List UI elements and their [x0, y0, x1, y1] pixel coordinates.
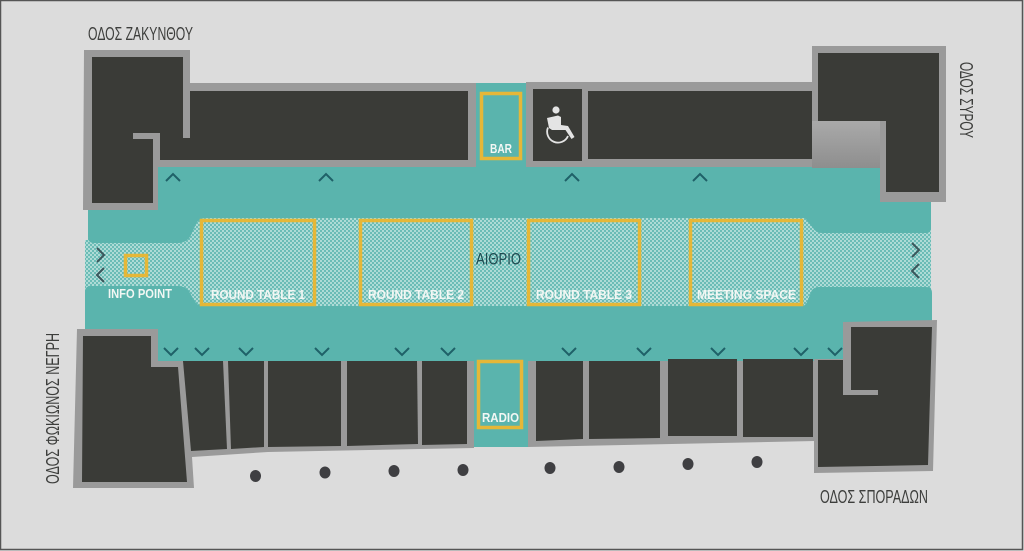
building: south-east block [814, 320, 937, 473]
building: south-east shops [528, 359, 815, 447]
street label: Sporadon: ΟΔΟΣ ΣΠΟΡΑΔΩΝ [820, 487, 928, 507]
dotted central aisle [85, 216, 931, 308]
zone: round table 1 [202, 220, 314, 304]
label: info point: INFO POINT [108, 286, 172, 301]
building: south-west block [73, 329, 474, 488]
arrows: east exits [912, 243, 919, 278]
arrows: south exits [164, 348, 842, 355]
atrium floor [85, 83, 932, 447]
zone: radio [478, 362, 522, 428]
label: round table 1: ROUND TABLE 1 [211, 287, 305, 302]
building: north-west block [83, 50, 476, 210]
label: meeting space: MEETING SPACE [697, 287, 796, 302]
label: bar: BAR [490, 141, 512, 156]
label: round table 2: ROUND TABLE 2 [368, 287, 464, 302]
label: radio: RADIO [482, 410, 519, 425]
street label: Syrou: ΟΔΟΣ ΣΥΡΟΥ [956, 62, 976, 138]
street label: Fokionos Negri: ΟΔΟΣ ΦΩΚΙΩΝΟΣ ΝΕΓΡΗ [43, 333, 63, 484]
label: atrium: ΑΙΘΡΙΟ [476, 250, 521, 268]
arrows: north exits [166, 174, 707, 181]
teal north walkway [88, 83, 931, 243]
zone: round table 2 [360, 220, 472, 304]
icon: wheelchair [547, 106, 574, 143]
shops: south-west row [183, 361, 467, 451]
zone: bar [482, 94, 520, 158]
zone: info point [108, 256, 172, 301]
arrows: west exits [97, 248, 104, 282]
zone: round table 3 [528, 220, 640, 304]
teal south walkway [85, 286, 932, 447]
label: round table 3: ROUND TABLE 3 [536, 287, 632, 302]
zone: meeting space [690, 220, 802, 304]
building: north-east block [812, 46, 946, 202]
building: accessible WC room [526, 82, 812, 167]
columns [250, 456, 762, 482]
street label: Zakynthou: ΟΔΟΣ ΖΑΚΥΝΘΟΥ [88, 24, 193, 44]
